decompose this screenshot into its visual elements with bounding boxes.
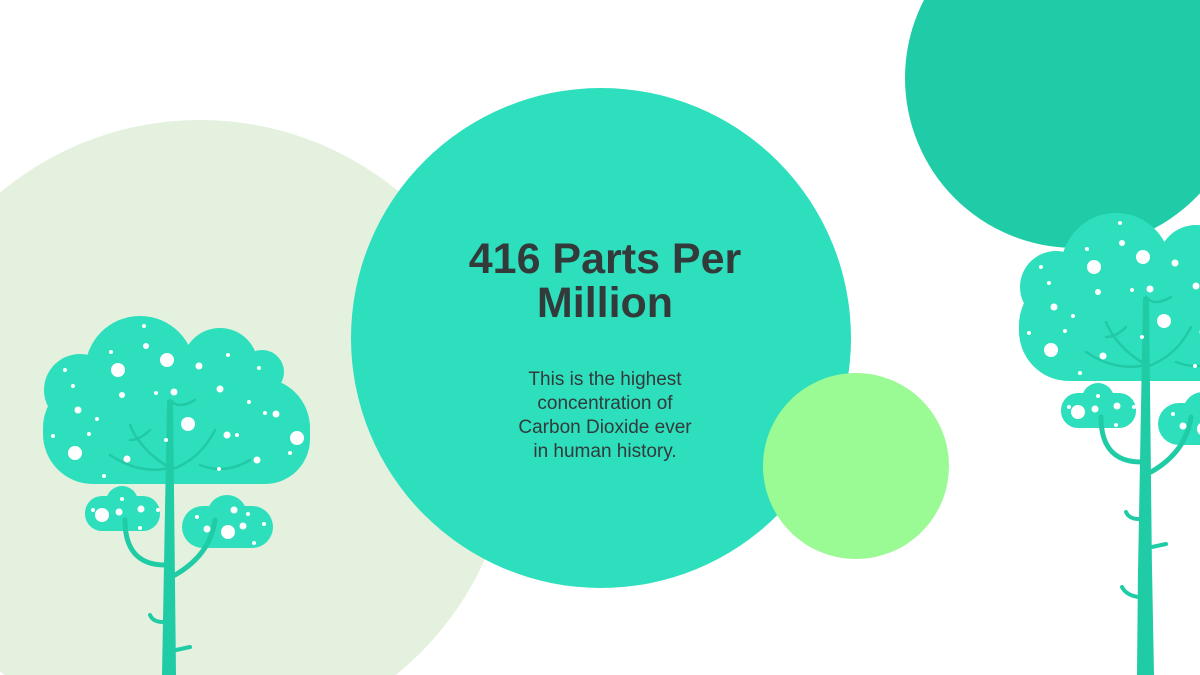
trunk: [162, 400, 176, 675]
title: 416 Parts Per Million: [469, 235, 741, 327]
branches: [110, 400, 250, 470]
main circle: teal: [351, 88, 851, 588]
body text: [518, 369, 692, 462]
background circle: light green: [0, 120, 512, 675]
dots: [51, 324, 304, 545]
tree: left: [43, 316, 310, 675]
circle: top right dark teal: [905, 0, 1200, 248]
body text: This is the highest: [528, 369, 682, 390]
circle: lime accent: [763, 373, 949, 559]
body text: in human history.: [533, 441, 677, 462]
body text: Carbon Dioxide ever: [518, 417, 692, 438]
tree: right: [1019, 213, 1200, 675]
body text: concentration of: [537, 393, 673, 414]
canopy: [43, 316, 310, 548]
